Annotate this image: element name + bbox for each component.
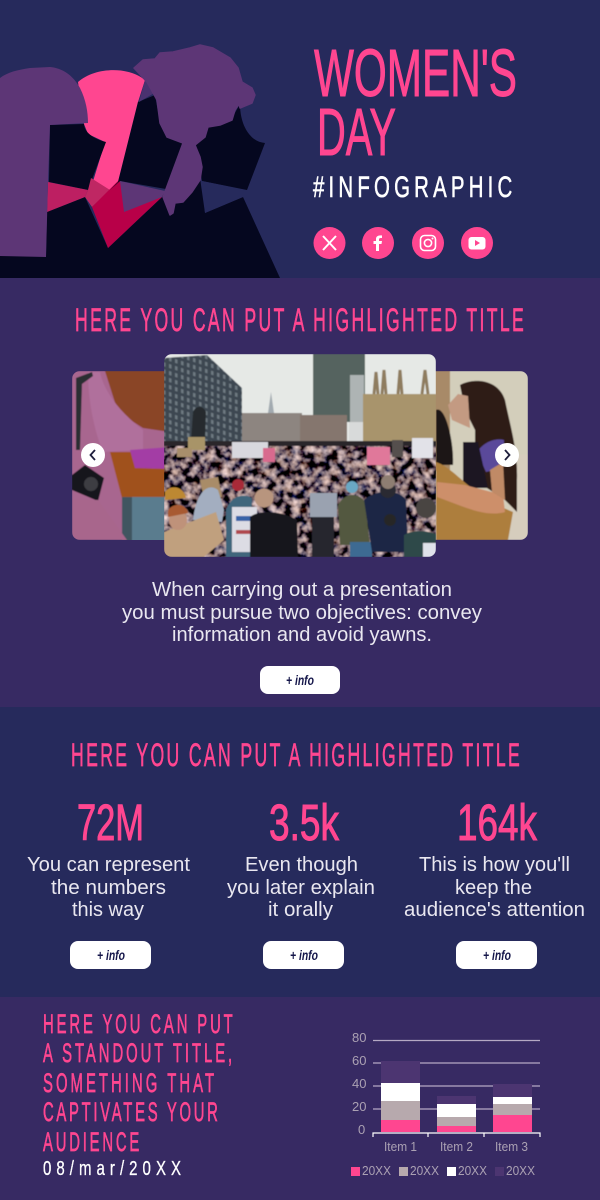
stat: 72M: the numbers (51, 877, 166, 899)
body text (122, 579, 482, 646)
panel: highlighted title with photo carousel (0, 278, 600, 707)
button: more info (260, 666, 340, 694)
stat: 164k: This is how you'll (419, 854, 570, 876)
illustration: three women in profile (0, 45, 280, 278)
bars: item 1 (381, 1061, 420, 1132)
body text: you must pursue two objectives: convey (122, 602, 482, 624)
icon: X (314, 227, 346, 259)
y axis labels: 80 (352, 1030, 366, 1045)
y axis labels: 60 (352, 1053, 366, 1068)
legend: 20XX (362, 1163, 391, 1178)
stat: 164k: + info (483, 947, 511, 963)
subtitle: #INFOGRAPHIC (313, 171, 512, 204)
stat: 72M: 72M (77, 794, 144, 851)
x axis labels (384, 1139, 528, 1154)
photo: central protest crowd image (164, 354, 436, 557)
stat: 72M: You can represent (27, 854, 190, 876)
standout title: AUDIENCE (43, 1126, 139, 1157)
legend (351, 1163, 535, 1178)
panel: statistics (0, 707, 600, 997)
social icons (314, 227, 493, 259)
stat: 3.5k: + info (290, 947, 318, 963)
legend: 20XX (458, 1163, 487, 1178)
stat: 164k: audience's attention (404, 899, 585, 921)
icon: Instagram (412, 227, 444, 259)
button: more info: + info (286, 672, 314, 688)
stat: 164k: 164k (457, 794, 537, 851)
stat: 164k: keep the (455, 877, 532, 899)
x axis labels: Item 2 (440, 1139, 473, 1154)
stat: 72M: + info (97, 947, 125, 963)
arrow: next (495, 443, 519, 467)
panel: header (0, 0, 600, 278)
stat: 3.5k (227, 794, 375, 969)
icon: YouTube (461, 227, 493, 259)
stacked bar chart (351, 1030, 540, 1178)
stat: 72M: this way (72, 899, 144, 921)
y axis labels: 40 (352, 1076, 366, 1091)
date: 08/mar/20XX (43, 1157, 181, 1180)
main title: DAY (317, 95, 396, 170)
arrow: previous (81, 443, 105, 467)
stat: 3.5k: Even though (245, 854, 358, 876)
standout title: SOMETHING THAT (43, 1067, 214, 1098)
panel: standout title and chart (0, 997, 600, 1200)
bars: item 3 (493, 1084, 532, 1132)
standout title: A STANDOUT TITLE, (43, 1037, 232, 1068)
icon: Facebook (362, 227, 394, 259)
x axis labels: Item 3 (495, 1139, 528, 1154)
photo: left carousel image (72, 371, 165, 540)
x axis labels: Item 1 (384, 1139, 417, 1154)
stat: 3.5k: 3.5k (269, 794, 339, 851)
legend: 20XX (506, 1163, 535, 1178)
photo: right carousel image (435, 371, 528, 540)
body text: When carrying out a presentation (152, 579, 452, 601)
y axis labels (352, 1030, 366, 1137)
heading: HERE YOU CAN PUT A HIGHLIGHTED TITLE (75, 304, 524, 338)
standout title: HERE YOU CAN PUT (43, 1008, 233, 1039)
heading: HERE YOU CAN PUT A HIGHLIGHTED TITLE (71, 739, 520, 773)
y axis labels: 0 (358, 1122, 365, 1137)
stat: 3.5k: it orally (268, 899, 333, 921)
stat: 3.5k: you later explain (227, 877, 375, 899)
y axis labels: 20 (352, 1099, 366, 1114)
bars: item 2 (437, 1096, 476, 1132)
stat: 164k (404, 794, 585, 969)
standout title (43, 1008, 233, 1157)
stat: 72M (27, 794, 190, 969)
standout title: CAPTIVATES YOUR (43, 1096, 218, 1127)
main title (314, 36, 517, 170)
legend: 20XX (410, 1163, 439, 1178)
body text: information and avoid yawns. (172, 624, 432, 646)
